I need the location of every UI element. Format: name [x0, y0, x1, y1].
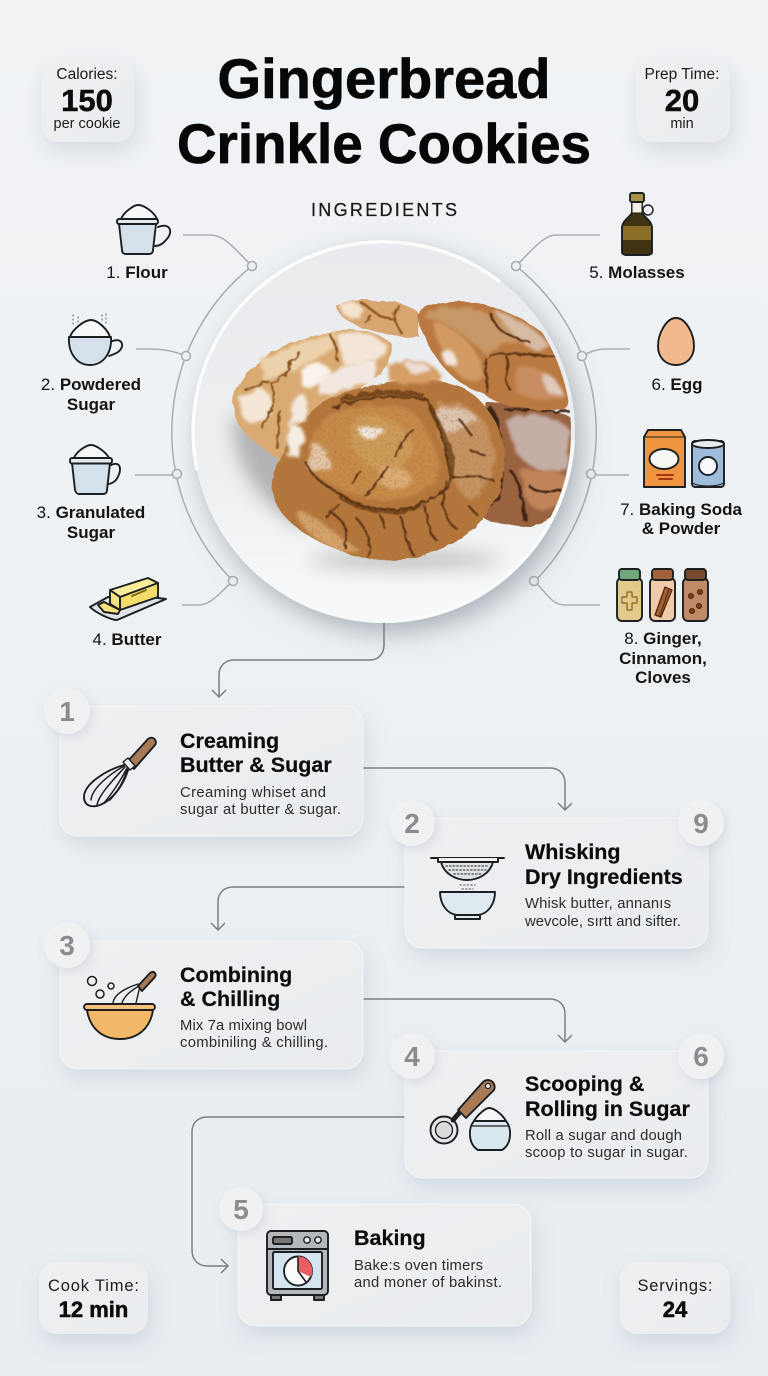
icon: three spice jars: [617, 569, 708, 621]
step card 1: creaming butter and sugar: Butter & Sugar: [180, 753, 332, 777]
stat card: servings: 24: [663, 1297, 688, 1322]
badge 1: [44, 688, 90, 734]
stat card: calories: per cookie: [54, 116, 120, 132]
top right cookie: [417, 301, 569, 410]
stat card: calories: Calories:: [56, 66, 118, 83]
icon: powdered sugar cup: [69, 314, 122, 365]
badge 3: 3: [59, 930, 75, 961]
icon: egg: [658, 318, 694, 365]
badge 9: 9: [693, 808, 709, 839]
badge 6: 6: [693, 1041, 709, 1072]
ingredient 1: flour: 1. Flour: [106, 263, 168, 282]
crinkle highlights: [287, 359, 442, 458]
badge 2: [389, 800, 435, 846]
step card 2: whisking dry ingredients: Dry Ingredients: [525, 865, 683, 889]
stat card: prep time: min: [670, 116, 694, 132]
icon: butter on dish: [90, 578, 166, 620]
icon: whisk: [84, 738, 156, 806]
step card 1: creaming butter and sugar: Creaming: [180, 729, 279, 753]
stat card: prep time: 20: [665, 83, 699, 118]
step card 5: baking: Baking: [354, 1226, 426, 1250]
badge 5: 5: [233, 1194, 249, 1225]
arrow: plate to step 1: [212, 623, 384, 697]
stat card: prep time: Prep Time:: [645, 66, 719, 83]
ingredient 1: flour: [106, 205, 170, 282]
lower right cookie: [480, 402, 575, 527]
icon: baking soda box and powder can: [644, 430, 724, 487]
cookies photo illustration: [232, 300, 575, 570]
arrow: step 2 to step 3: [211, 887, 405, 930]
title: Crinkle Cookies: [177, 112, 591, 175]
step card 3: combining and chilling: combiniling & chilling.: [180, 1035, 328, 1051]
badge 4: 4: [404, 1041, 420, 1072]
ingredient 8: ginger, cinnamon, cloves: 8. Ginger,: [624, 629, 702, 648]
step card 4: scooping and rolling in sugar: Roll a sugar and dough: [525, 1128, 682, 1144]
plate: [193, 241, 575, 623]
icon: oven with timer: [267, 1231, 328, 1300]
badge 3: [44, 922, 90, 968]
stat card: servings: [620, 1262, 730, 1334]
section heading: ingredients: INGREDIENTS: [311, 200, 457, 220]
step card 1: creaming butter and sugar: sugar at butter & sugar.: [180, 802, 341, 818]
stat card: calories: [41, 58, 134, 142]
badge 2: 2: [404, 808, 420, 839]
main cookie: [272, 379, 506, 561]
step card 5: baking: and moner of bakinst.: [354, 1275, 502, 1291]
step card 2: whisking dry ingredients: Whisking: [525, 840, 621, 864]
icon: sieve over bowl: [431, 858, 504, 919]
step card 2: whisking dry ingredients: wevcole, sırtt and sifter.: [524, 914, 681, 930]
step card 4: scooping and rolling in sugar: scoop to sugar in sugar.: [525, 1145, 688, 1161]
ingredient 8: ginger, cinnamon, cloves: Cloves: [635, 668, 691, 687]
step card 4: scooping and rolling in sugar: Rolling in Sugar: [525, 1097, 690, 1121]
stat card: cook time: Cook Time:: [48, 1277, 139, 1295]
ring connecting ingredients to plate: [135, 235, 630, 605]
plate of cookies: [193, 241, 575, 623]
arrow: step 1 to step 2: [363, 768, 572, 810]
icon: flour cup: [117, 205, 170, 254]
step card 1: creaming butter and sugar: [44, 688, 363, 836]
step card 2: whisking dry ingredients: [389, 800, 724, 948]
ingredient 5: molasses: [589, 193, 685, 282]
stat card: calories: 150: [61, 83, 113, 118]
ingredient 7: baking soda and powder: [620, 430, 742, 538]
title: Gingerbread: [218, 47, 550, 110]
ingredient 2: powdered sugar: Sugar: [67, 395, 115, 414]
title: [177, 47, 591, 175]
stat card: servings: Servings:: [638, 1277, 712, 1295]
ingredient 8: ginger, cinnamon, cloves: Cinnamon,: [619, 649, 707, 668]
badge 1: 1: [59, 696, 75, 727]
step card 3: combining and chilling: [44, 922, 363, 1069]
icon: scoop and sugar bowl: [430, 1080, 510, 1150]
ingredient 4: butter: 4. Butter: [93, 630, 162, 649]
arrow: step 3 to step 4: [363, 999, 572, 1042]
ingredient 2: powdered sugar: 2. Powdered: [41, 375, 141, 394]
arrow: step 4 to step 5: [192, 1117, 405, 1273]
badge 4: [389, 1033, 435, 1079]
stat card: cook time: [39, 1262, 148, 1334]
step card 2: whisking dry ingredients: Whisk butter, annanıs: [525, 896, 671, 912]
top small cookie: [336, 300, 420, 338]
badge 5: [219, 1187, 263, 1231]
ingredient 7: baking soda and powder: & Powder: [642, 519, 721, 538]
step card 4: scooping and rolling in sugar: Scooping &: [525, 1072, 644, 1096]
ingredient 7: baking soda and powder: 7. Baking Soda: [620, 500, 742, 519]
stat card: prep time: [636, 58, 730, 142]
ingredient 8: ginger, cinnamon, cloves: [617, 569, 708, 687]
icon: mixing bowl and whisk: [84, 972, 156, 1039]
stat card: cook time: 12 min: [59, 1297, 128, 1322]
step card 4: scooping and rolling in sugar: [389, 1033, 724, 1178]
step card 3: combining and chilling: Combining: [180, 963, 292, 987]
ingredient 6: egg: 6. Egg: [651, 375, 703, 394]
ingredient 3: granulated sugar: 3. Granulated: [37, 503, 145, 522]
ingredient 3: granulated sugar: Sugar: [67, 523, 115, 542]
left back cookie: [233, 330, 393, 470]
step card 3: combining and chilling: & Chilling: [180, 987, 280, 1011]
ingredient 3: granulated sugar: [37, 445, 145, 542]
badge 6: [678, 1033, 724, 1079]
step card 3: combining and chilling: Mix 7a mixing bowl: [180, 1018, 307, 1034]
icon: molasses jug: [622, 193, 653, 255]
ingredient 2: powdered sugar: [41, 314, 141, 414]
step card 1: creaming butter and sugar: Creaming whiset and: [180, 785, 326, 801]
icon: granulated sugar cup: [70, 445, 120, 494]
step card 5: baking: [219, 1187, 531, 1326]
step card 5: baking: Bake:s oven timers: [354, 1258, 483, 1274]
badge 9: [678, 800, 724, 846]
ingredient 6: egg: [651, 318, 703, 394]
ingredient 4: butter: [90, 578, 166, 649]
ingredient 5: molasses: 5. Molasses: [589, 263, 685, 282]
